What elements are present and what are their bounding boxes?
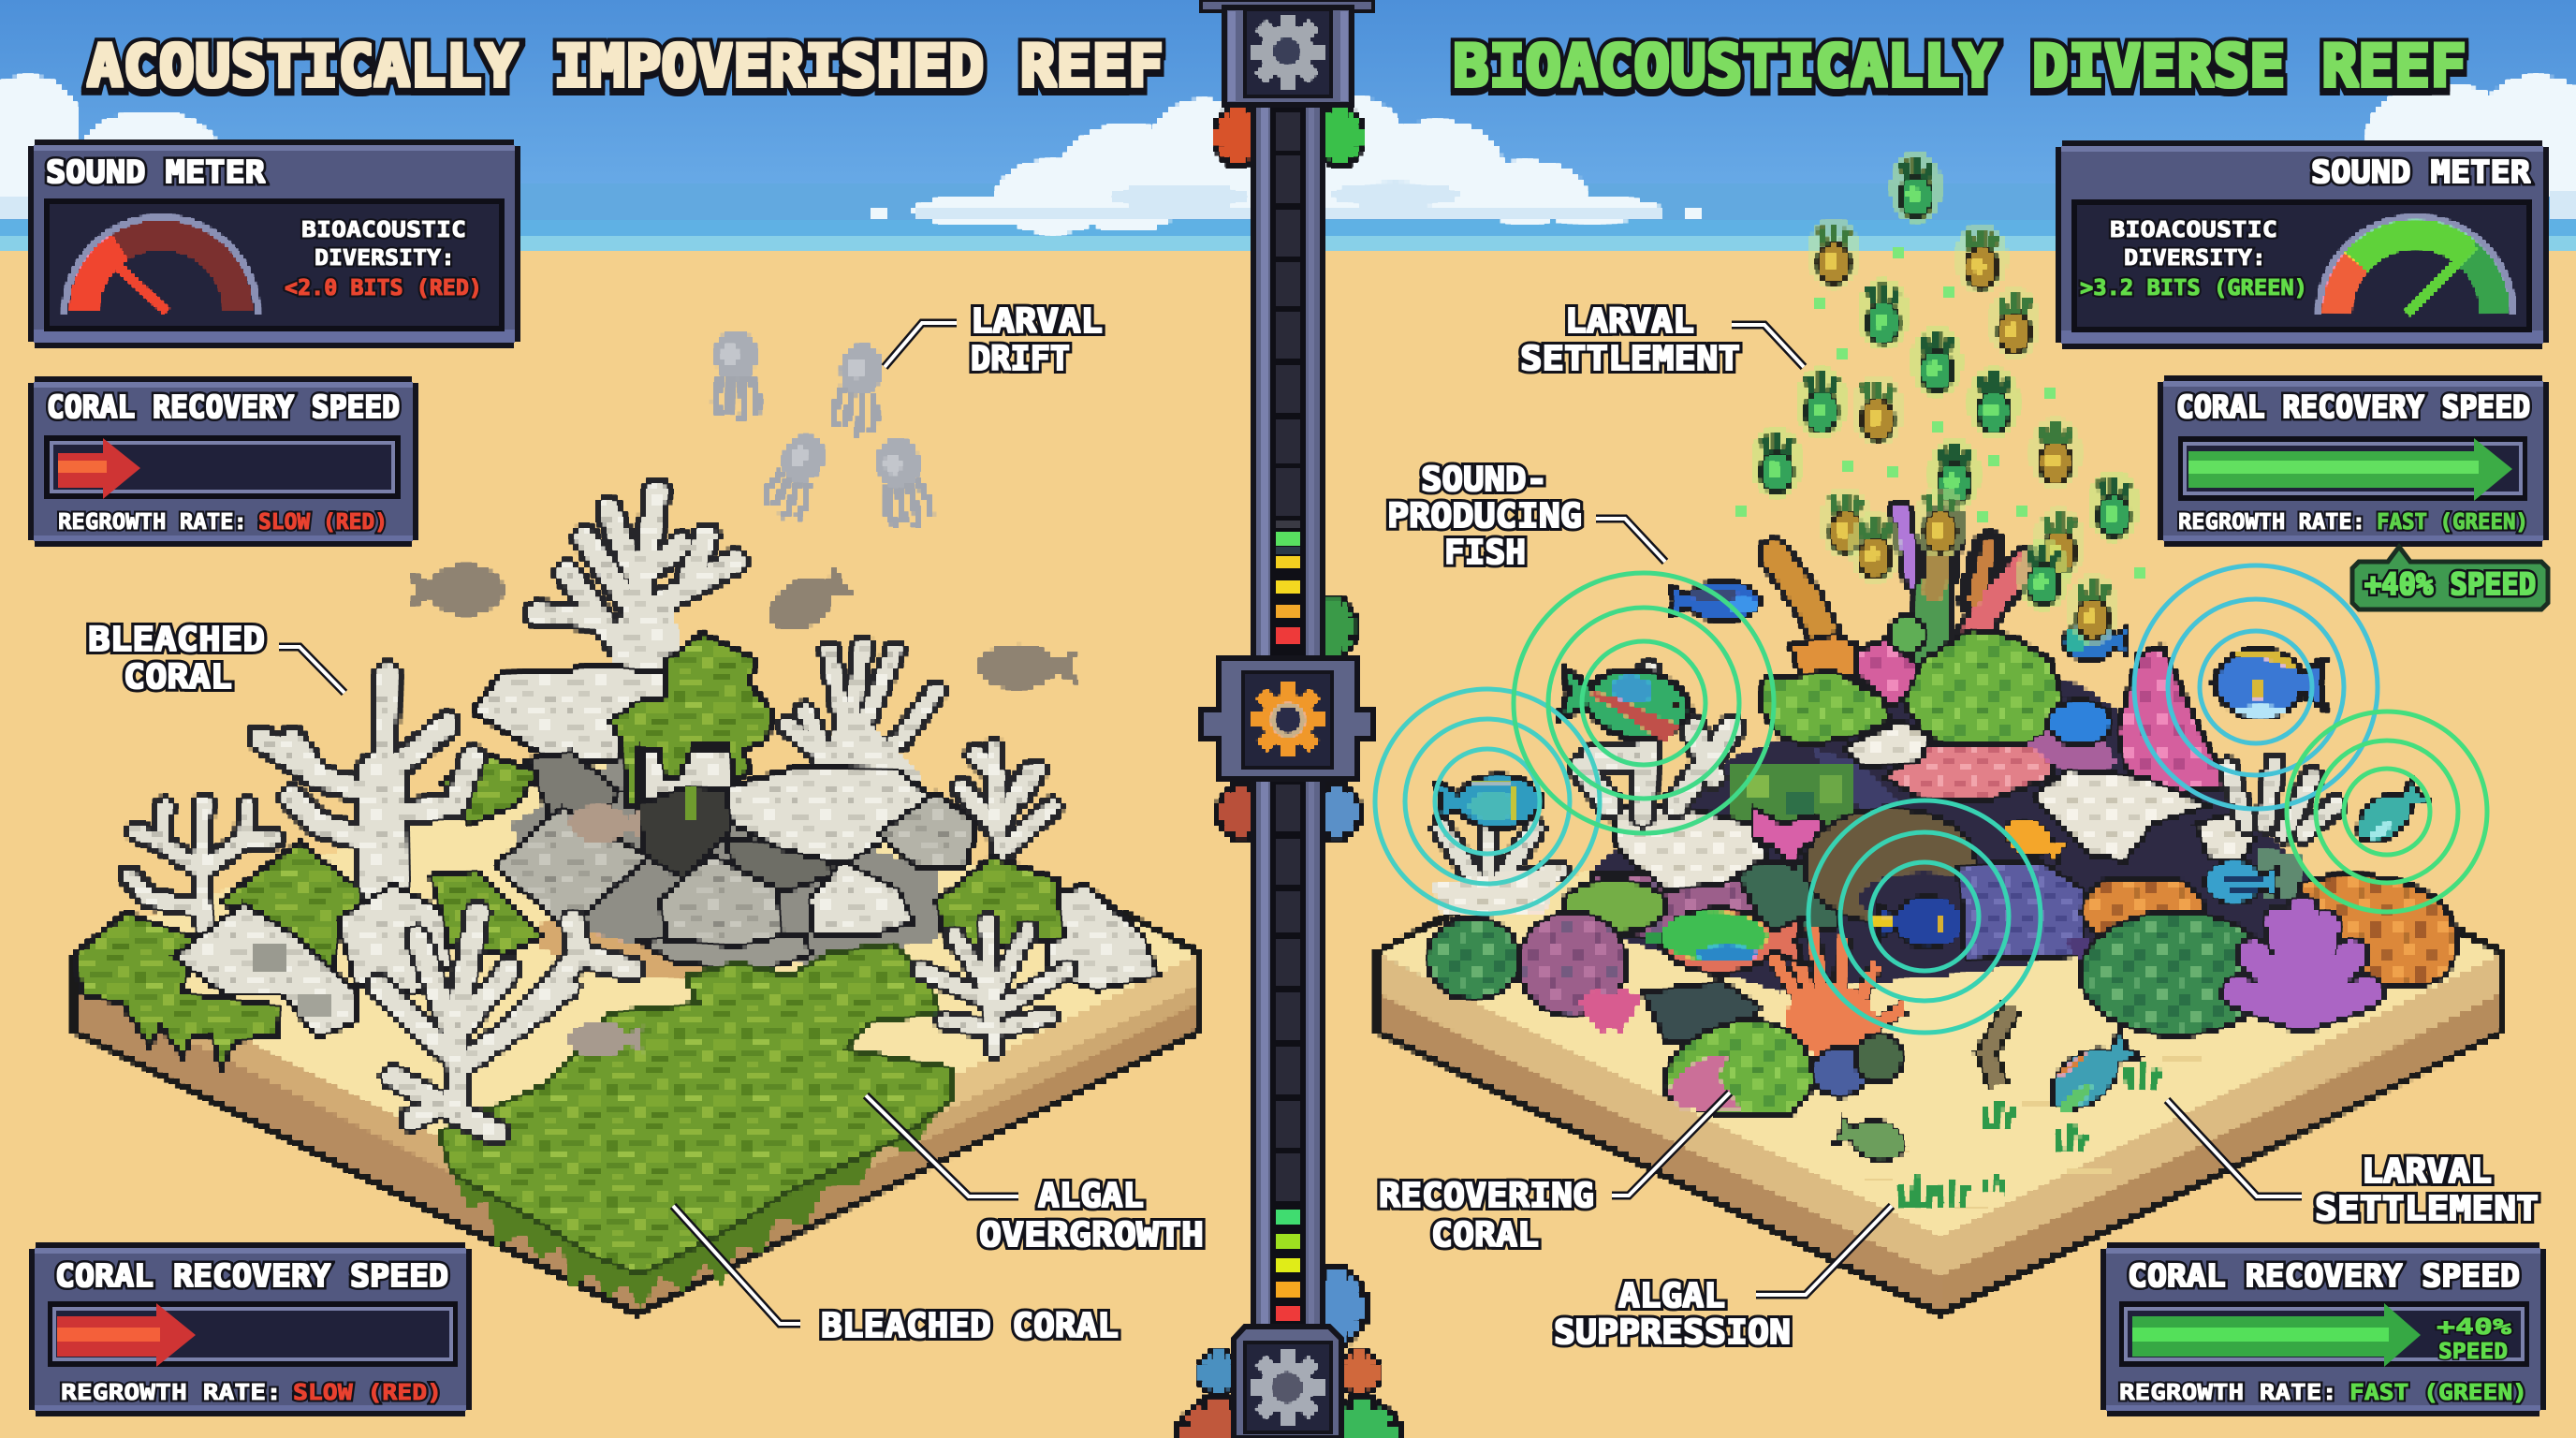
meter: lower column segments (1276, 785, 1300, 1321)
boulders: front left bleached (173, 885, 451, 1037)
fish: green parrotfish lower left (1645, 909, 1804, 973)
coral: back right bleached (788, 646, 1052, 889)
text: regrowth rate fast: REGROWTH RATE: (2119, 1381, 2337, 1405)
progress bar: fast green arrow with +40%: +40% (2437, 1315, 2511, 1340)
label: bleached coral upper: CORAL (124, 658, 232, 697)
coral: large left bleached (260, 674, 473, 885)
label: bleached coral lower: BLEACHED CORAL (821, 1307, 1119, 1345)
label: recovering coral: CORAL (1431, 1216, 1539, 1255)
coral: central branches (1774, 510, 2027, 655)
coral: recovering mound (1663, 1020, 1814, 1116)
sound rings: green set far right (2287, 712, 2487, 912)
corals: front left mounds (1427, 912, 1760, 1044)
corals: right mounds (2080, 875, 2457, 1035)
text: regrowth rate fast (2119, 1381, 2527, 1405)
sound rings: teal set center (1808, 800, 2041, 1033)
label: larval settlement lower: LARVAL (2362, 1152, 2492, 1191)
label: algal suppression (1554, 1206, 1892, 1352)
fish: pale grey fish group (410, 559, 1077, 1057)
text: regrowth rate slow: REGROWTH RATE: (61, 1381, 282, 1405)
fish: parrotfish on sand (2038, 1024, 2145, 1123)
corals: back mounds (1760, 616, 2228, 796)
progress bar: slow red arrow (47, 438, 398, 499)
title: bioacoustically diverse reef: BIOACOUSTICALLY DIVERSE REEF (1453, 32, 2466, 100)
readout: bioacoustic diversity low: BIOACOUSTIC (301, 218, 466, 242)
heading: coral recovery speed: CORAL RECOVERY SPEED (55, 1257, 448, 1294)
fish: parrotfish in rings (1557, 660, 1695, 745)
sound rings: green set upper left (1514, 573, 1774, 833)
moss: large algal mat (439, 944, 953, 1274)
gear housing: top (1201, 0, 1373, 105)
label: larval settlement upper: LARVAL (1565, 302, 1694, 341)
progress bar: fast green arrow with +40%: SPEED (2438, 1340, 2508, 1364)
label: recovering coral (1379, 1093, 1730, 1255)
label: sound-producing fish: SOUND- (1421, 461, 1547, 499)
label: sound-producing fish (1387, 461, 1665, 572)
readout: bioacoustic diversity low (285, 218, 482, 301)
label: larval settlement upper: SETTLEMENT (1520, 340, 1740, 378)
larvae: drifting grey larvae (714, 330, 934, 532)
label: algal suppression: ALGAL (1618, 1277, 1725, 1315)
callout: +40% speed: +40% SPEED (2364, 566, 2536, 602)
heading: coral recovery speed: CORAL RECOVERY SPEED (2128, 1257, 2520, 1294)
label: algal overgrowth (866, 1095, 1204, 1255)
corals: center mound and lavender (1805, 808, 2101, 964)
fish: teal fish in rings (1436, 775, 1543, 828)
label: larval drift: LARVAL (971, 302, 1103, 341)
gear housing: center (1201, 658, 1373, 779)
text: regrowth rate slow (58, 510, 388, 535)
label: larval drift: DRIFT (971, 340, 1070, 378)
pixel clouds (0, 75, 2576, 234)
gauge: high diversity (2074, 202, 2529, 330)
readout: bioacoustic diversity low: <2.0 BITS (RED) (285, 276, 482, 301)
moss: mound on top rocks (220, 634, 1063, 985)
text: regrowth rate fast: REGROWTH RATE: (2178, 510, 2365, 535)
central column (1201, 0, 1373, 1438)
heading: coral recovery speed: CORAL RECOVERY SPEED (2176, 389, 2530, 425)
progress bar: fast green arrow (2181, 438, 2525, 501)
panel: coral recovery speed upper left (28, 376, 418, 547)
text: regrowth rate slow: REGROWTH RATE: (58, 510, 247, 535)
fish: blue top fish (1670, 581, 1761, 621)
larvae: green and gold settling larvae (1734, 152, 2147, 645)
heading: sound meter right: SOUND METER (2311, 154, 2530, 190)
label: bleached coral upper: BLEACHED (88, 621, 265, 659)
label: sound-producing fish: PRODUCING (1387, 497, 1582, 536)
rocks: bleached plates and grey boulders (473, 665, 1159, 990)
sound rings: teal set left (1375, 689, 1600, 914)
panel: sound meter right (2056, 140, 2549, 349)
meter: upper column segments (1276, 112, 1300, 644)
icons: small side gears (1178, 105, 1401, 1438)
coral: purple fingers (2239, 913, 2366, 1016)
readout: bioacoustic diversity high: BIOACOUSTIC (2110, 218, 2277, 242)
coral: top branching bleached (537, 492, 735, 693)
progress bar: fast green arrow with +40% (2122, 1303, 2526, 1367)
reef backing: dark crevice mass (1591, 674, 2434, 992)
fish: tang in rings (2214, 650, 2325, 717)
fish: teal fish right rings (2348, 774, 2432, 853)
coral: lower right bleached (921, 922, 1067, 1049)
seaweed: brown stalk on sand (1986, 1006, 2012, 1086)
label: recovering coral: RECOVERING (1379, 1177, 1594, 1215)
label: larval settlement upper (1520, 302, 1804, 378)
sand base right (1377, 749, 2503, 1313)
label: larval settlement lower: SETTLEMENT (2315, 1190, 2539, 1228)
label: algal overgrowth: ALGAL (1038, 1177, 1144, 1215)
title: acoustically impoverished reef: ACOUSTICALLY IMPOVERISHED REEF (87, 32, 1164, 100)
fish: small reef fish (1998, 622, 2278, 903)
coral: far left bleached (129, 803, 273, 927)
label: bleached coral lower (673, 1206, 1119, 1345)
coral: orange fan (1760, 927, 1905, 1056)
moss: large algal mat drips (439, 1068, 953, 1311)
panel: coral recovery speed lower left (29, 1242, 472, 1416)
text: regrowth rate fast: FAST (GREEN) (2349, 1381, 2527, 1405)
text: regrowth rate fast: FAST (GREEN) (2377, 510, 2528, 535)
corals: mid plates (1562, 721, 2303, 941)
text: regrowth rate slow: SLOW (RED) (258, 510, 388, 535)
panel: coral recovery speed upper right (2158, 375, 2549, 547)
diorama: diverse reef (1377, 152, 2503, 1313)
readout: bioacoustic diversity high: DIVERSITY: (2124, 246, 2266, 271)
coral: lower center bleached (378, 913, 632, 1133)
fish: center blue fish (1872, 896, 1962, 948)
label: sound-producing fish: FISH (1444, 534, 1526, 572)
label: bleached coral upper (88, 621, 344, 697)
panel: coral recovery speed lower right (2100, 1242, 2546, 1416)
gauge: low diversity (47, 201, 502, 329)
label: larval settlement lower (2167, 1100, 2539, 1228)
progress bar: slow red arrow (51, 1303, 455, 1367)
label: larval drift (885, 302, 1103, 378)
panel: sound meter left (28, 139, 520, 348)
corals: dark rocks center (1812, 1034, 1904, 1096)
readout: bioacoustic diversity low: DIVERSITY: (315, 246, 455, 271)
readout: bioacoustic diversity high: >3.2 BITS (GREEN) (2080, 276, 2307, 301)
heading: sound meter left: SOUND METER (46, 154, 265, 190)
label: algal suppression: SUPPRESSION (1554, 1313, 1791, 1352)
readout: bioacoustic diversity high (2080, 218, 2307, 301)
sound rings: cyan set right (2134, 565, 2378, 809)
sand base left (74, 749, 1199, 1313)
heading: coral recovery speed: CORAL RECOVERY SPEED (47, 389, 400, 425)
diorama: impoverished reef (74, 330, 1199, 1313)
sprouts: algal suppression seedlings (1899, 1061, 2159, 1210)
text: regrowth rate slow: SLOW (RED) (293, 1381, 442, 1405)
fish: small green on sand (1832, 1110, 1910, 1167)
callout: +40% speed (2352, 547, 2548, 609)
gear housing: bottom (1234, 1327, 1341, 1438)
text: regrowth rate slow (61, 1381, 442, 1405)
label: algal overgrowth: OVERGROWTH (979, 1216, 1204, 1255)
text: regrowth rate fast (2178, 510, 2528, 535)
moss: left corner with drips (74, 913, 281, 1069)
coral: white branching under rings (1432, 674, 2335, 913)
